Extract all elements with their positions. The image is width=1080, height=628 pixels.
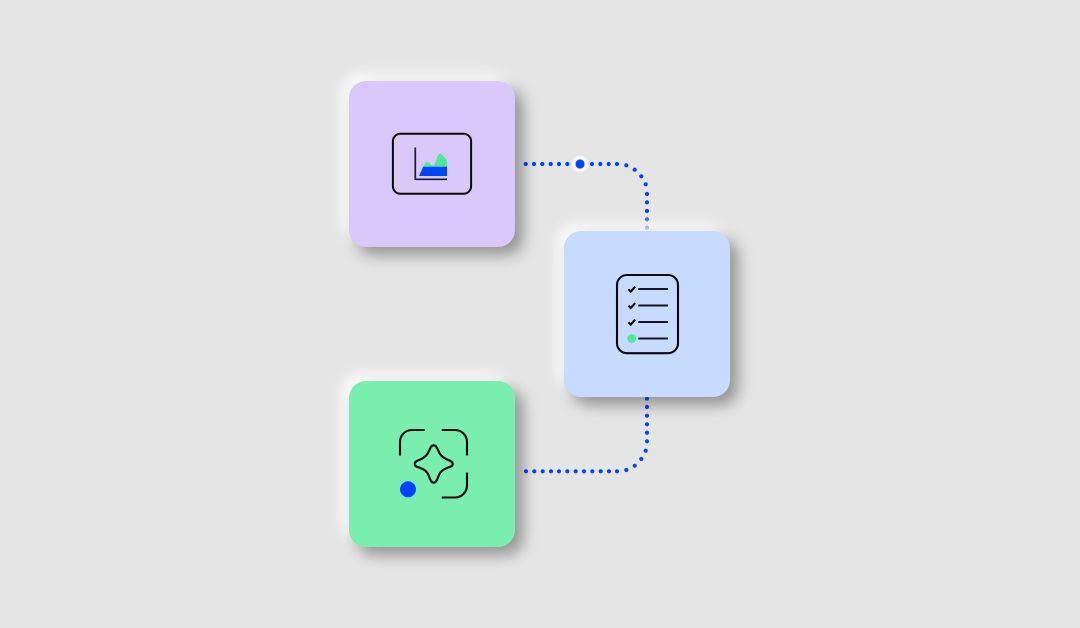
panel: sparkle card: [349, 381, 515, 547]
icon: area chart: [392, 132, 472, 195]
icon: sparkle in scan frame: [398, 429, 468, 498]
icon: checklist document: [616, 274, 680, 354]
panel: checklist card: [564, 231, 730, 397]
panel: chart card: [349, 81, 515, 247]
